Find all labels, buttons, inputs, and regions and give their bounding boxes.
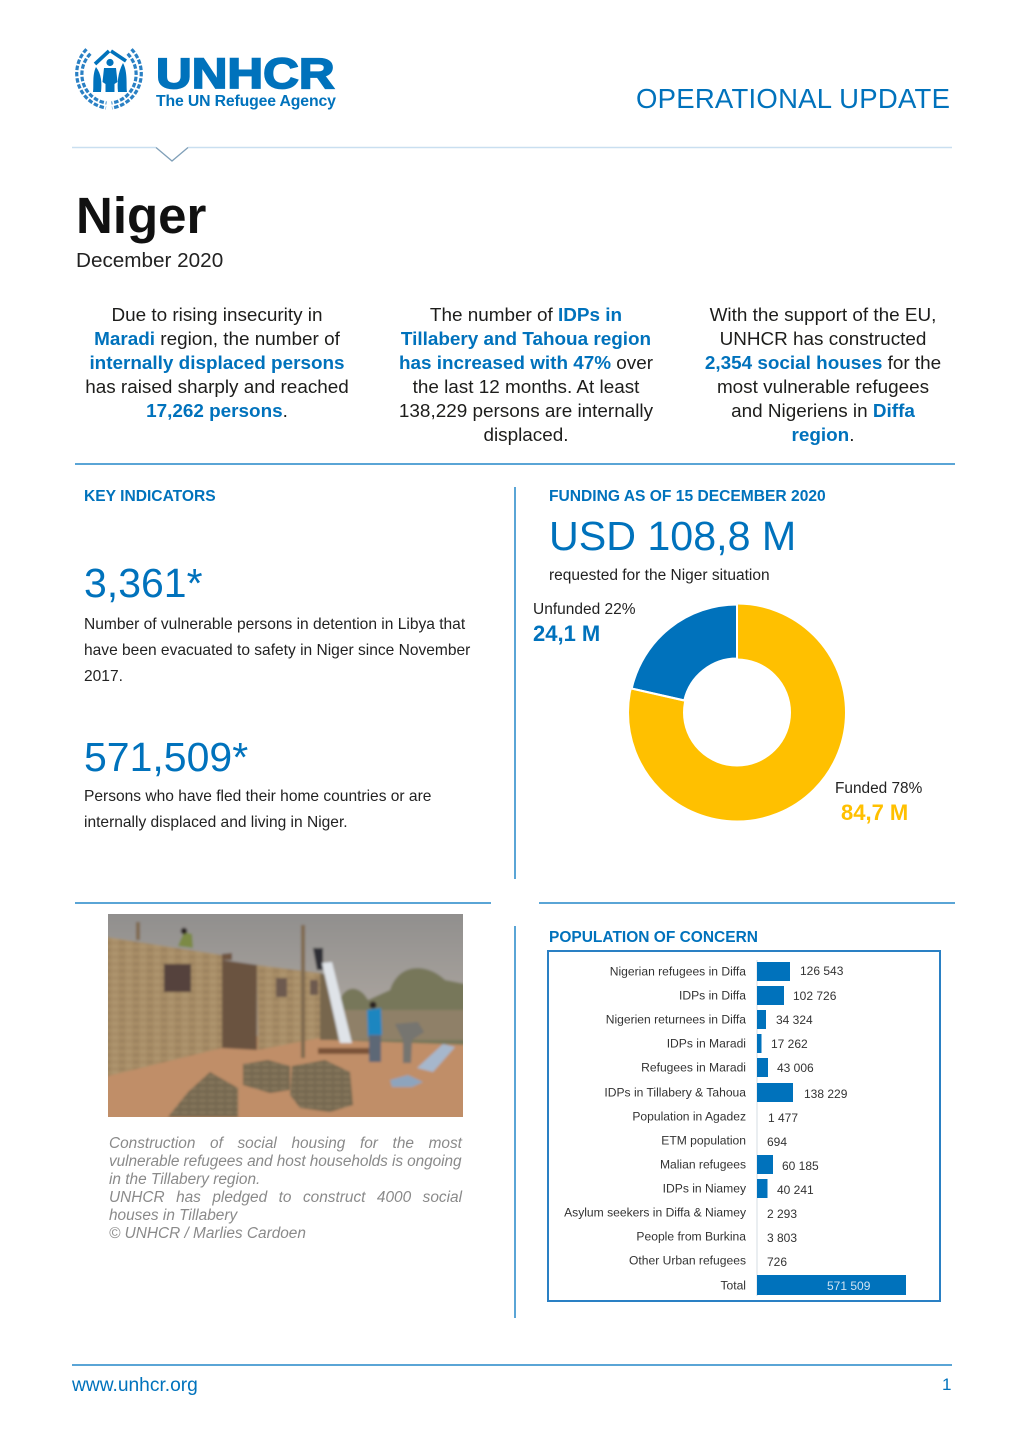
footer: website: www.unhcr.org: [72, 1375, 198, 1396]
indicator: evacuated persons text: 2017.: [84, 668, 123, 685]
label: unfunded: Unfunded 22%: [533, 601, 636, 618]
bar chart: population of concern: 102 726: [793, 989, 837, 1003]
indicator: evacuated persons text: [84, 616, 470, 685]
photo caption: in the Tillabery region.: [109, 1171, 260, 1188]
photo caption: construct: [303, 1189, 365, 1206]
highlight: Maradi displacement: internally displaced persons: [89, 353, 345, 374]
photo caption: 4000: [377, 1189, 411, 1206]
highlight: social houses: region.: [792, 425, 854, 446]
tagline: The UN Refugee Agency: [156, 93, 336, 110]
highlight: Maradi displacement: Due to rising insecurity in: [111, 305, 323, 326]
bar chart: population of concern: 126 543: [800, 964, 844, 978]
highlight: Tillabery and Tahoua IDPs: displaced.: [483, 425, 569, 446]
bar chart: population of concern: IDPs in Niamey: [663, 1182, 747, 1196]
label: funded: Funded 78%: [835, 780, 922, 797]
document type label: OPERATIONAL UPDATE: [636, 83, 950, 114]
bar chart: population of concern: 138 229: [804, 1087, 848, 1101]
indicator: persons of concern text: internally displaced and living in Niger.: [84, 814, 348, 831]
photo caption: social: [237, 1135, 277, 1152]
bar chart: population of concern: 726: [767, 1255, 787, 1269]
bar chart: population of concern: 17 262: [771, 1037, 808, 1051]
photo caption: for: [360, 1135, 378, 1152]
title: Niger: [76, 187, 206, 244]
highlight: social houses: With the support of the EU,: [710, 305, 936, 326]
photo caption: the: [393, 1135, 414, 1152]
donut chart: [629, 604, 845, 820]
indicator: evacuated persons text: have been evacuated to safety in Niger since November: [84, 642, 470, 659]
photo caption: houses in Tillabery: [109, 1207, 237, 1224]
bar chart: population of concern: 2 293: [767, 1207, 797, 1221]
funding subtitle: requested for the Niger situation: [549, 567, 770, 584]
bar chart: population of concern: Malian refugees: [660, 1158, 746, 1172]
bar chart: population of concern: Asylum seekers in Diffa & Niamey: [564, 1206, 747, 1220]
highlight: social houses: most vulnerable refugees: [717, 377, 929, 398]
bar chart: population of concern: 43 006: [777, 1061, 814, 1075]
photo caption: of: [210, 1135, 223, 1152]
bar chart: population of concern: [547, 950, 941, 1302]
header divider with chevron: [72, 146, 952, 162]
bar chart: population of concern: Nigerien returnees in Diffa: [606, 1012, 746, 1026]
photo caption: vulnerable refugees and host households is ongoing: [109, 1153, 461, 1170]
highlight: social houses: 2,354 social houses for the: [705, 353, 941, 374]
highlight: Maradi displacement: 17,262 persons.: [146, 401, 288, 422]
bar chart: population of concern: 3 803: [767, 1231, 797, 1245]
photo caption: pledged: [212, 1189, 267, 1206]
photo caption: most: [429, 1135, 462, 1152]
bar chart: population of concern: Other Urban refugees: [629, 1254, 746, 1268]
wordmark: UNHCR: [156, 50, 335, 98]
highlight: Tillabery and Tahoua IDPs: [399, 305, 653, 446]
highlight: Tillabery and Tahoua IDPs: has increased with 47% over: [399, 353, 653, 374]
highlight: social houses: [705, 305, 941, 446]
photo caption: Construction: [109, 1135, 195, 1152]
indicator: persons of concern text: [84, 788, 431, 831]
panel: key indicators: [84, 488, 470, 831]
photo caption: social: [423, 1189, 462, 1206]
highlight: social houses: UNHCR has constructed: [720, 329, 926, 350]
heading: population of concern: POPULATION OF CONCERN: [549, 929, 758, 946]
highlight: Maradi displacement: has raised sharply and reached: [85, 377, 349, 398]
highlight: Maradi displacement: [85, 305, 349, 422]
indicator: evacuated persons number: 3,361*: [84, 560, 203, 606]
photo caption: to: [279, 1189, 291, 1206]
heading: funding: FUNDING AS OF 15 DECEMBER 2020: [549, 488, 826, 505]
logo: UNHCR: [75, 48, 336, 110]
bar chart: population of concern: People from Burkina: [636, 1230, 746, 1244]
bar chart: population of concern: IDPs in Diffa: [679, 988, 746, 1002]
indicator: persons of concern number: 571,509*: [84, 734, 248, 780]
bar chart: population of concern: Refugees in Maradi: [641, 1060, 746, 1074]
icon: UNHCR emblem: [75, 48, 143, 110]
photo caption: has: [176, 1189, 201, 1206]
value: unfunded: 24,1 M: [533, 621, 600, 646]
bar chart: population of concern: 40 241: [777, 1183, 814, 1197]
indicator: evacuated persons text: Number of vulnerable persons in detention in Libya that: [84, 616, 465, 633]
funding total: USD 108,8 M: [549, 513, 796, 559]
bar chart: population of concern: 60 185: [782, 1159, 819, 1173]
bar chart: population of concern: 571 509: [827, 1279, 871, 1293]
bar chart: population of concern: Total: [720, 1278, 746, 1292]
indicator: persons of concern text: Persons who have fled their home countries or are: [84, 788, 431, 805]
heading: key indicators: KEY INDICATORS: [84, 488, 216, 505]
footer: page number: 1: [942, 1375, 951, 1394]
photo caption: housing: [291, 1135, 345, 1152]
bar chart: population of concern: Population in Agadez: [632, 1110, 746, 1124]
value: funded: 84,7 M: [841, 800, 908, 825]
bar chart: population of concern: Nigerian refugees in Diffa: [610, 964, 746, 978]
bar chart: population of concern: 1 477: [768, 1111, 798, 1125]
highlight: Tillabery and Tahoua IDPs: Tillabery and Tahoua region: [401, 329, 651, 350]
photo caption: [109, 1135, 462, 1242]
highlight: social houses: and Nigeriens in Diffa: [731, 401, 915, 422]
date: December 2020: [76, 249, 223, 272]
highlight: Maradi displacement: Maradi region, the number of: [94, 329, 340, 350]
highlight: Tillabery and Tahoua IDPs: the last 12 months. At least: [413, 377, 639, 398]
highlight: Tillabery and Tahoua IDPs: The number of IDPs in: [430, 305, 622, 326]
bar chart: population of concern: 34 324: [776, 1013, 813, 1027]
highlight: Tillabery and Tahoua IDPs: 138,229 persons are internally: [399, 401, 653, 422]
bar chart: population of concern: IDPs in Tillabery & Tahoua: [604, 1086, 746, 1100]
photo caption: UNHCR: [109, 1189, 165, 1206]
bar chart: population of concern: ETM population: [661, 1134, 746, 1148]
photo: social housing construction: [108, 914, 463, 1117]
panel: funding: [533, 488, 922, 825]
photo caption: © UNHCR / Marlies Cardoen: [109, 1225, 306, 1242]
bar chart: population of concern: IDPs in Maradi: [667, 1036, 746, 1050]
bar chart: population of concern: 694: [767, 1135, 787, 1149]
